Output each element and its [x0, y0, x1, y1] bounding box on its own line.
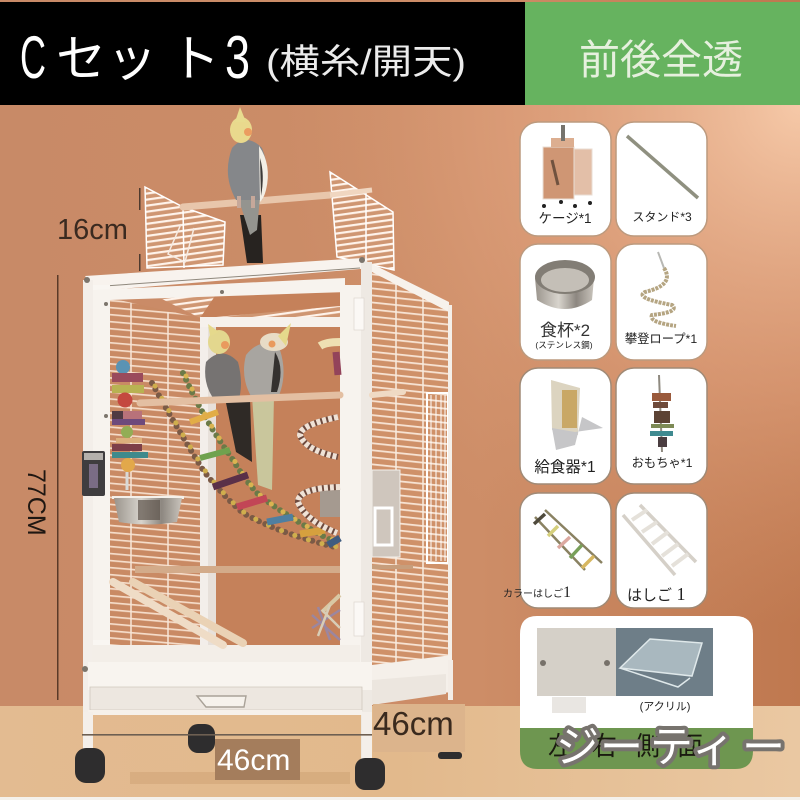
- card: colour ladder: カラーはしご1: [503, 584, 571, 601]
- card: stand: [616, 122, 707, 236]
- card: food cup: (ステンレス鋼): [535, 339, 593, 350]
- top edge: [85, 258, 372, 291]
- header bar: title: (横糸/開天): [266, 43, 466, 82]
- card: acrylic side panels: (アクリル): [640, 700, 690, 713]
- cockatiel on top perch: [228, 107, 268, 263]
- header bar: front and back see-through label: 前後全透: [579, 37, 743, 83]
- front posts: [83, 280, 93, 750]
- card: stand: スタンド*3: [632, 210, 692, 224]
- top perch and side gates: [145, 172, 394, 270]
- header bar: title: C: [20, 25, 46, 91]
- card: food cup: 食杯*2: [540, 321, 590, 340]
- bolts: [82, 257, 369, 674]
- card: acrylic side panels: 左右側面: [548, 731, 703, 761]
- watermark text: ジーティー: [556, 724, 785, 772]
- colourful ladder: [152, 373, 340, 547]
- ceiling grid: [160, 296, 215, 318]
- card: food cup: [520, 244, 611, 360]
- purple toy ball: [312, 595, 340, 640]
- dimension: beige 46cm label: 46cm: [373, 705, 454, 742]
- dimension: 16cm: [57, 188, 140, 271]
- card: toy: おもちゃ*1: [632, 456, 693, 470]
- card: ladder: [616, 493, 707, 608]
- card: feeder: 給食器*1: [534, 458, 596, 476]
- cage body: [82, 257, 453, 760]
- bottom tray: [92, 645, 360, 662]
- card: toy: [616, 368, 707, 484]
- dimension: dark 46cm label: 46cm: [217, 744, 290, 777]
- card: climbing rope: 攀登ロープ*1: [625, 331, 697, 346]
- panel photo: metal plate: [537, 628, 616, 696]
- central perch: [140, 392, 403, 403]
- card: cage: ケージ*1: [538, 211, 592, 226]
- panel photo: acrylic sheets: [616, 628, 713, 696]
- card: acrylic side panels: [520, 616, 753, 769]
- dimension: beige 46cm label: [373, 704, 465, 752]
- card: feeder: [520, 368, 611, 484]
- header bar: title: [0, 2, 525, 105]
- legs: [83, 712, 93, 749]
- card: colour ladder: [503, 493, 611, 608]
- rope perches: [298, 342, 340, 533]
- dimension: dark 46cm label: [215, 739, 300, 780]
- header bar: title: 3: [225, 25, 250, 92]
- card: cage: [520, 122, 611, 236]
- card: climbing rope: [616, 244, 707, 360]
- dimension: 16cm: 16cm: [57, 214, 128, 246]
- lower perch and platform stands: [113, 566, 413, 645]
- hanging toy: [112, 360, 148, 490]
- back wall seen through the open front: [200, 293, 345, 645]
- casters: [75, 724, 462, 790]
- dimension: width line: [82, 734, 372, 736]
- header bar: title: セット: [56, 31, 220, 87]
- hinges: [354, 298, 364, 330]
- right wall wires: [372, 270, 452, 668]
- food bowl: [112, 496, 184, 524]
- door latch: [82, 451, 105, 496]
- card: ladder: はしご 1: [627, 584, 686, 604]
- dimension: 77CM: 77CM: [22, 469, 50, 536]
- left wall wires: [110, 298, 200, 645]
- header bar: front and back see-through label: [525, 2, 800, 105]
- wooden floor: [0, 706, 800, 800]
- two cockatiels in cage: [205, 323, 291, 490]
